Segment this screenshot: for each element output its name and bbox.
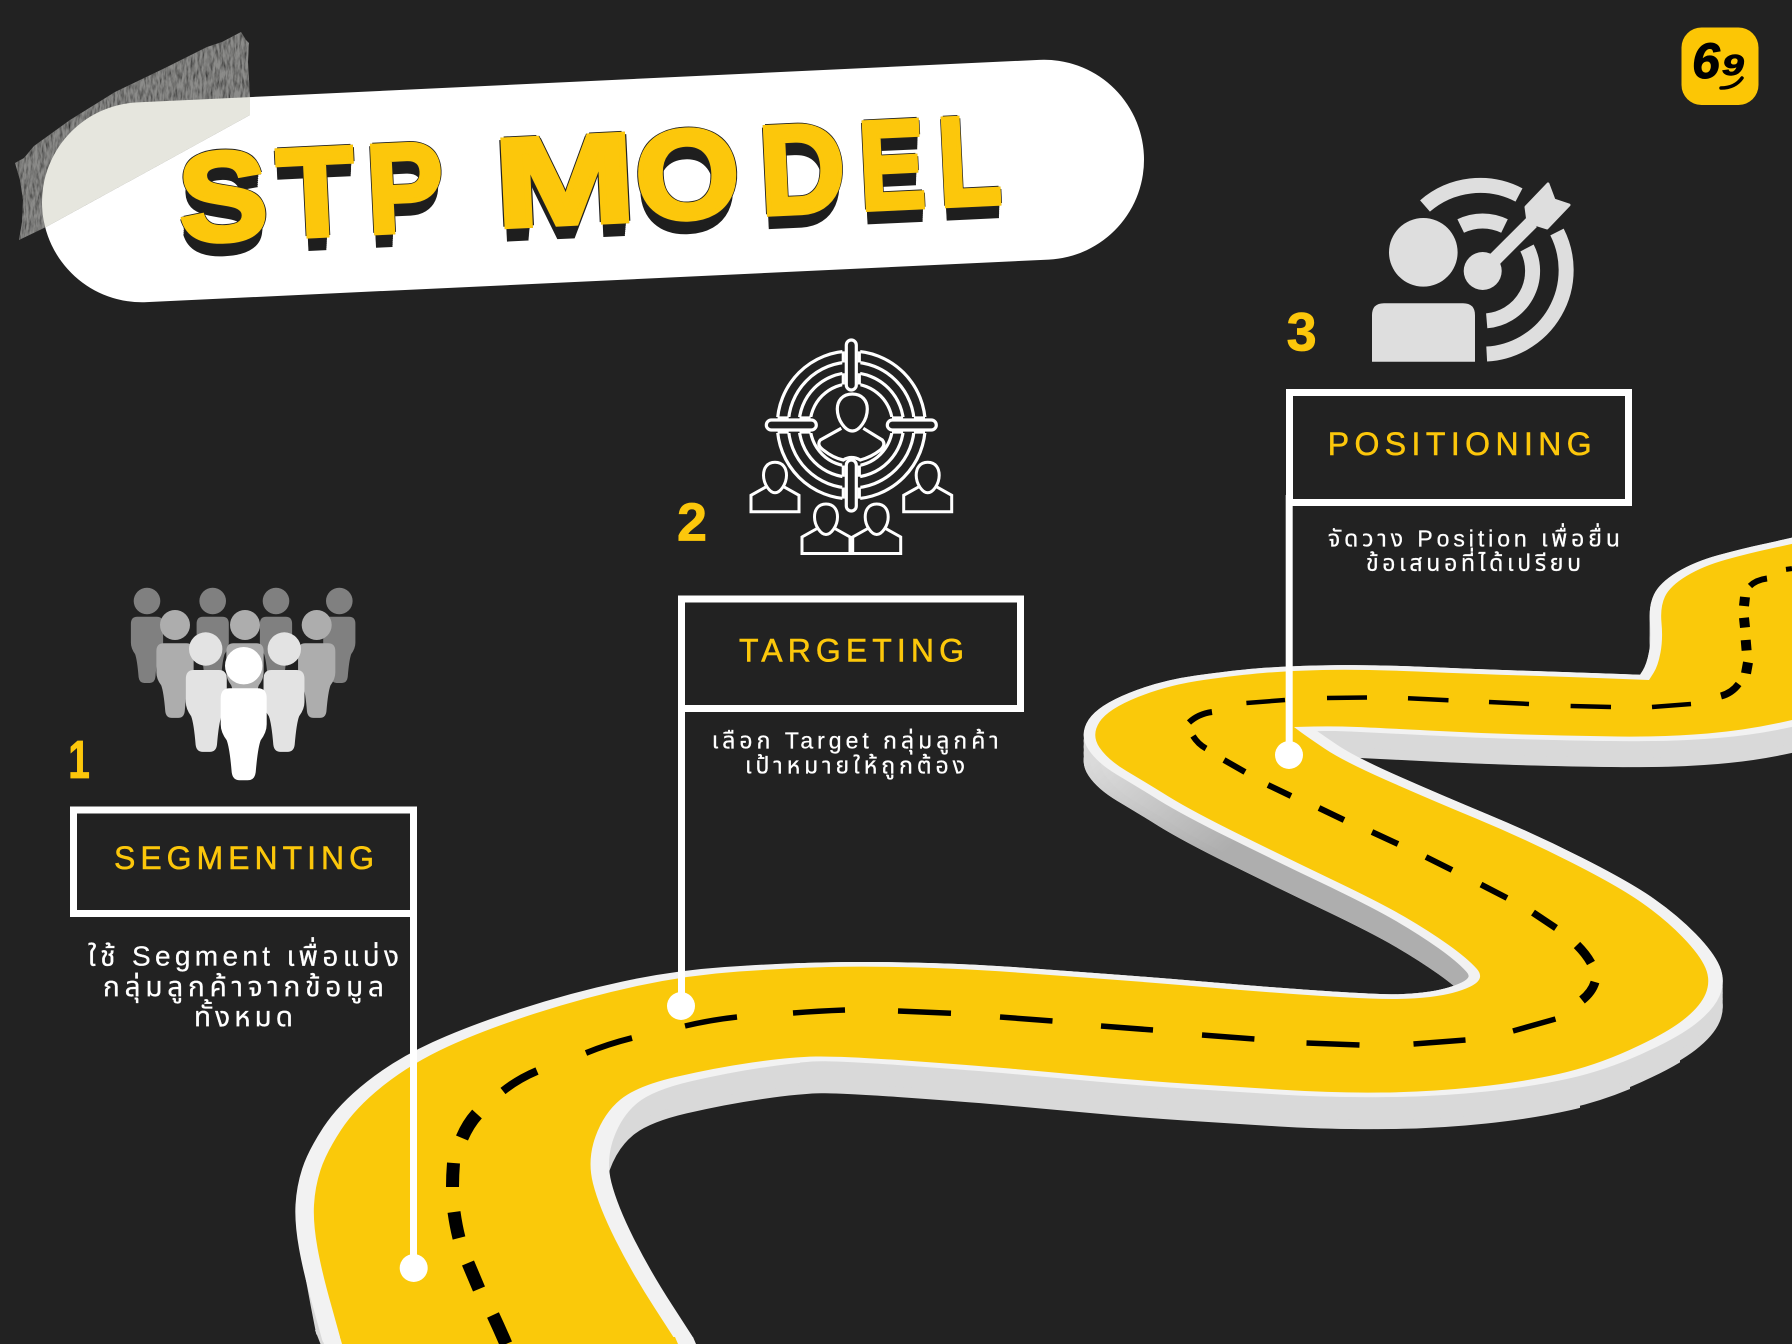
description: positioning: ข้อเสนอที่ได้เปรียบ <box>1366 547 1581 576</box>
step 1: segmenting <box>68 588 428 1282</box>
description: targeting <box>712 727 999 780</box>
heading: segmenting: SEGMENTING <box>114 840 374 876</box>
road <box>300 535 1792 1344</box>
description: segmenting: กลุ่มลูกค้าจากข้อมูล <box>103 971 384 1004</box>
description: targeting: เลือก Target กลุ่มลูกค้า <box>712 727 999 755</box>
title: STP MODEL: S <box>176 124 270 269</box>
washi tape <box>15 32 250 240</box>
road white border <box>307 535 1792 1339</box>
title: STP MODEL: T <box>274 120 357 265</box>
description: positioning <box>1328 523 1620 576</box>
logo badge: 6 <box>1692 33 1721 89</box>
road white border filler at canvas bottom <box>322 1337 696 1344</box>
title: STP MODEL: P <box>363 116 446 260</box>
label box: positioning <box>1290 392 1628 502</box>
step 2: targeting <box>667 335 1020 1020</box>
pin line and dot: segmenting <box>400 880 428 1282</box>
description: positioning: จัดวาง Position เพื่อยื่น <box>1328 523 1620 552</box>
label box: targeting <box>682 599 1020 708</box>
road centre dashes <box>452 569 1792 1344</box>
road side sliver at canvas bottom <box>315 1330 332 1344</box>
icon: target with people <box>751 335 952 554</box>
road shaded side on the diagonal <box>1070 739 1468 994</box>
number 2: 2 <box>677 493 707 553</box>
number 1: 1 <box>68 729 90 789</box>
pin line and dot: targeting <box>667 700 695 1020</box>
road deeper side in the foreground <box>306 1060 1680 1334</box>
title: STP MODEL: M <box>491 107 638 254</box>
title: STP MODEL: E <box>856 93 928 237</box>
road wider white border in the foreground <box>295 963 800 1342</box>
step 3: positioning <box>1275 184 1628 769</box>
description: segmenting: ทั้งหมด <box>194 999 293 1032</box>
road yellow surface <box>314 535 1792 1344</box>
pin line and dot: positioning <box>1275 495 1303 769</box>
heading: targeting: TARGETING <box>739 633 964 669</box>
heading: positioning: POSITIONING <box>1328 426 1592 462</box>
title: STP MODEL: L <box>935 89 1004 233</box>
description: targeting: เป้าหมายให้ถูกต้อง <box>745 752 965 780</box>
icon: person with dartboard <box>1372 184 1569 362</box>
label box: segmenting <box>74 810 414 914</box>
description: segmenting <box>88 937 399 1032</box>
title: STP MODEL: O <box>632 102 743 248</box>
logo badge: 9 <box>1722 50 1744 82</box>
road side depth <box>307 535 1792 1324</box>
title banner <box>37 55 1149 307</box>
icon: crowd of people <box>131 588 355 780</box>
logo badge <box>1682 28 1758 105</box>
description: segmenting: ใช้ Segment เพื่อแบ่ง <box>88 937 399 972</box>
title: STP MODEL <box>176 89 1004 269</box>
title: STP MODEL: D <box>756 97 848 242</box>
number 3: 3 <box>1287 302 1317 362</box>
